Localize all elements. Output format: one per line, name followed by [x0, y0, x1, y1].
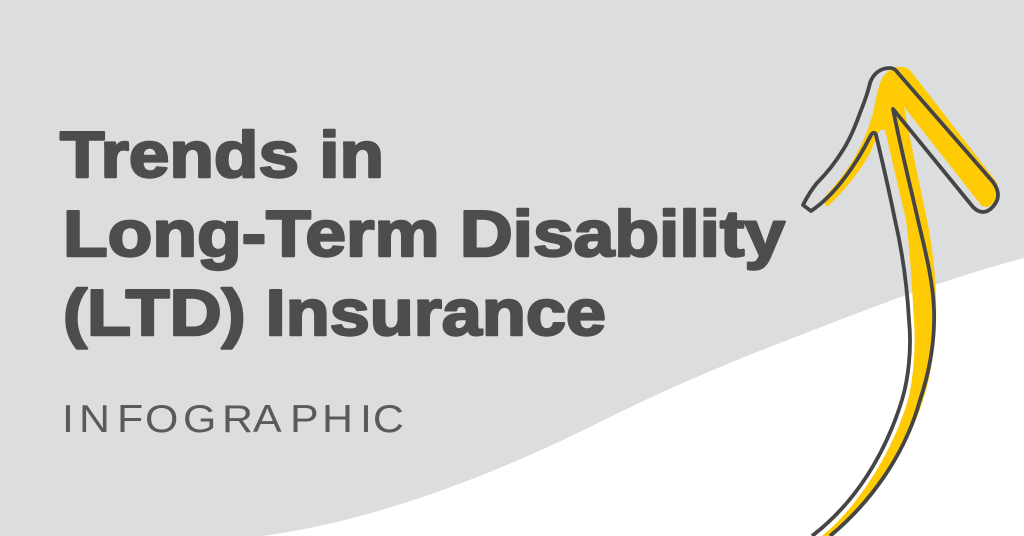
title [60, 118, 785, 349]
title: Long-Term Disability [63, 197, 785, 270]
icon: upward arrow [803, 67, 998, 536]
subtitle: INFOGRAPHIC: INFOGRAPHIC [62, 397, 404, 441]
title: Trends in [60, 118, 384, 191]
arrow yellow fill [822, 67, 998, 536]
title: (LTD) Insurance [63, 276, 606, 349]
arrow dark outline [803, 68, 998, 536]
